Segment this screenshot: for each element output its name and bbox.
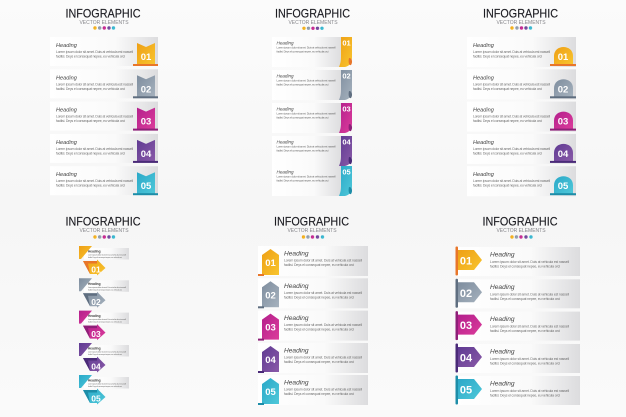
step 05: 05	[91, 394, 101, 404]
step 05: Lorem ipsum dolor sit amet. Duis at vehicula est nassell	[284, 388, 362, 392]
step 05: facilisi. Deys el consequat nepee, eu vehicula orci	[473, 184, 542, 188]
step 04: Lorem ipsum dolor sit amet. Duis at vehicula est nassell	[490, 357, 569, 361]
step 02: 02	[265, 290, 276, 301]
title: INFOGRAPHIC	[482, 216, 558, 228]
step 05: Heading	[473, 172, 495, 178]
step 01	[272, 37, 352, 67]
step 03: facilisi. Deys el consequat nepee, eu vehicula orci	[284, 328, 354, 332]
step 05: Heading	[276, 170, 294, 174]
step 03: 03	[460, 320, 472, 332]
step 02: 02	[342, 72, 351, 80]
panel: scroll infographic	[272, 8, 352, 196]
step 03: Heading	[276, 106, 294, 112]
step 04	[79, 343, 129, 372]
step 03: Lorem ipsum dolor sit amet. Duis at vehicula est nassell	[276, 112, 336, 116]
step 01: Lorem ipsum dolor sit amet. Duis at vehicula est nassell	[56, 50, 133, 54]
step 02: 02	[558, 84, 568, 95]
step 04: Heading	[284, 348, 309, 354]
step 05	[79, 375, 129, 404]
step 03: 03	[265, 323, 276, 334]
step 03: Lorem ipsum dolor sit amet. Duis at vehicula est nassell	[473, 115, 550, 119]
step 04: facilisi. Deys el consequat nepee, eu vehicula orci	[284, 360, 354, 364]
step 01: Lorem ipsum dolor sit amet. Duis at vehicula est nassell	[473, 50, 550, 54]
step 01: Lorem ipsum dolor sit amet. Duis at vehicula est nassell	[284, 258, 362, 262]
step 03: facilisi. Deys el consequat nepee, eu vehicula orci	[56, 119, 125, 123]
step 03: 03	[91, 329, 101, 339]
step 05: facilisi. Deys el consequat nepee, eu vehicula orci	[88, 385, 123, 388]
step 01: Heading	[284, 250, 309, 258]
step 04: Heading	[490, 348, 515, 356]
panel: tag infographic	[456, 216, 580, 405]
step 05	[456, 376, 580, 405]
step 02: facilisi. Deys el consequat nepee, eu vehicula orci	[284, 295, 354, 299]
step 01: Heading	[490, 252, 515, 258]
step 05: 05	[342, 168, 351, 176]
subtitle: VECTOR ELEMENTS	[79, 20, 129, 26]
step 04	[456, 344, 580, 373]
step 03: Heading	[56, 108, 78, 114]
step 02: facilisi. Deys el consequat nepee, eu vehicula orci	[473, 87, 542, 91]
step 02: Heading	[56, 75, 78, 81]
step 05	[258, 375, 368, 405]
step 01: 01	[342, 38, 351, 48]
step 04: Heading	[276, 140, 294, 144]
step 04: Lorem ipsum dolor sit amet. Duis at vehicula est nassell	[473, 147, 550, 151]
step 02: facilisi. Deys el consequat nepee, eu vehicula orci	[276, 82, 329, 86]
step 02	[258, 278, 368, 308]
step 04: 04	[91, 362, 101, 372]
step 01: Heading	[473, 43, 495, 49]
step 02: Heading	[284, 283, 309, 290]
step 04: Heading	[473, 140, 495, 146]
step 04: facilisi. Deys el consequat nepee, eu vehicula orci	[490, 362, 560, 366]
step 03: Lorem ipsum dolor sit amet. Duis at vehicula est nassell	[284, 323, 362, 327]
step 04: 04	[460, 352, 473, 364]
colour dots	[302, 235, 324, 239]
subtitle: VECTOR ELEMENTS	[79, 228, 129, 234]
step 01: Heading	[56, 43, 78, 49]
step 04: facilisi. Deys el consequat nepee, eu vehicula orci	[56, 151, 125, 155]
step 01: facilisi. Deys el consequat nepee, eu vehicula orci	[473, 54, 542, 58]
colour dots	[93, 26, 115, 30]
step 01: Lorem ipsum dolor sit amet. Duis at vehicula est nassell	[276, 46, 336, 50]
step 02: Lorem ipsum dolor sit amet. Duis at vehicula est nassell	[276, 78, 336, 82]
title: INFOGRAPHIC	[66, 216, 140, 228]
step 02: Lorem ipsum dolor sit amet. Duis at vehicula est nassell	[284, 291, 362, 295]
colour dots	[510, 26, 532, 30]
step 05: facilisi. Deys el consequat nepee, eu vehicula orci	[490, 394, 560, 398]
step 04	[50, 134, 158, 163]
step 02	[272, 70, 352, 100]
step 05	[467, 166, 576, 196]
step 04: 04	[342, 138, 351, 146]
step 03: Heading	[284, 315, 309, 322]
step 02: 02	[460, 288, 472, 300]
step 04: Heading	[56, 140, 78, 146]
step 02	[467, 69, 576, 99]
step 02: Heading	[490, 284, 515, 291]
step 01: 01	[460, 256, 472, 268]
step 05: Lorem ipsum dolor sit amet. Duis at vehicula est nassell	[56, 179, 133, 183]
step 05	[272, 166, 352, 196]
title: INFOGRAPHIC	[275, 8, 350, 20]
step 04	[272, 136, 352, 166]
step 03: facilisi. Deys el consequat nepee, eu vehicula orci	[276, 116, 329, 120]
step 03	[258, 311, 368, 341]
step 01: Lorem ipsum dolor sit amet. Duis at vehicula est nassell	[88, 254, 127, 256]
step 03: Heading	[473, 108, 495, 114]
step 05: Heading	[88, 378, 101, 382]
subtitle: VECTOR ELEMENTS	[288, 20, 338, 26]
step 05	[50, 166, 158, 195]
step 02: Lorem ipsum dolor sit amet. Duis at vehicula est nassell	[490, 292, 569, 296]
step 04: 04	[141, 149, 152, 160]
step 02	[50, 69, 158, 98]
step 04: facilisi. Deys el consequat nepee, eu vehicula orci	[276, 148, 329, 152]
step 03: 03	[558, 117, 568, 128]
step 05: Lorem ipsum dolor sit amet. Duis at vehicula est nassell	[88, 382, 127, 386]
step 01: 01	[141, 52, 152, 63]
step 05: Lorem ipsum dolor sit amet. Duis at vehicula est nassell	[473, 179, 550, 183]
step 02: Heading	[473, 75, 495, 81]
step 04: facilisi. Deys el consequat nepee, eu vehicula orci	[473, 151, 542, 155]
step 03: 03	[141, 117, 151, 128]
title: INFOGRAPHIC	[274, 216, 349, 228]
step 03: facilisi. Deys el consequat nepee, eu vehicula orci	[88, 321, 123, 324]
step 03: Lorem ipsum dolor sit amet. Duis at vehicula est nassell	[88, 318, 127, 321]
panel: dome infographic	[467, 8, 576, 196]
step 05: Lorem ipsum dolor sit amet. Duis at vehicula est nassell	[490, 389, 569, 393]
step 02: 02	[91, 297, 101, 307]
panel: arrow infographic	[66, 216, 140, 404]
step 02: Lorem ipsum dolor sit amet. Duis at vehicula est nassell	[56, 82, 133, 86]
step 03	[50, 102, 158, 131]
step 05: 05	[460, 384, 472, 396]
step 05: Heading	[284, 380, 309, 386]
colour dots	[93, 235, 115, 239]
step 03: Heading	[490, 316, 515, 323]
step 04: Lorem ipsum dolor sit amet. Duis at vehicula est nassell	[56, 147, 133, 151]
colour dots	[510, 235, 533, 239]
step 01: facilisi. Deys el consequat nepee, eu vehicula orci	[490, 264, 560, 268]
step 02: facilisi. Deys el consequat nepee, eu vehicula orci	[88, 288, 123, 291]
step 03	[467, 102, 576, 132]
step 05: Heading	[490, 380, 515, 388]
step 05: facilisi. Deys el consequat nepee, eu vehicula orci	[56, 184, 125, 188]
step 01: Heading	[88, 250, 101, 254]
step 02	[79, 278, 129, 308]
step 05: Lorem ipsum dolor sit amet. Duis at vehicula est nassell	[276, 174, 336, 178]
step 02	[456, 279, 580, 308]
title: INFOGRAPHIC	[66, 8, 140, 20]
step 03: facilisi. Deys el consequat nepee, eu vehicula orci	[473, 119, 542, 123]
step 03	[272, 103, 352, 133]
step 02: 02	[141, 84, 151, 95]
step 04: Lorem ipsum dolor sit amet. Duis at vehicula est nassell	[276, 144, 336, 148]
step 01: facilisi. Deys el consequat nepee, eu vehicula orci	[56, 54, 125, 58]
step 04: Heading	[88, 346, 101, 350]
step 01: 01	[265, 258, 276, 269]
step 01: 01	[558, 52, 569, 63]
step 01	[79, 246, 129, 276]
subtitle: VECTOR ELEMENTS	[287, 228, 337, 234]
step 03	[456, 311, 580, 341]
step 01	[50, 37, 158, 66]
step 04: Lorem ipsum dolor sit amet. Duis at vehicula est nassell	[284, 356, 362, 360]
step 01	[467, 37, 576, 67]
step 04: 04	[558, 149, 569, 160]
step 01: Heading	[276, 40, 294, 46]
step 03: Lorem ipsum dolor sit amet. Duis at vehicula est nassell	[56, 115, 133, 119]
step 03: facilisi. Deys el consequat nepee, eu vehicula orci	[490, 329, 560, 333]
step 02: Heading	[88, 282, 101, 286]
step 02: Lorem ipsum dolor sit amet. Duis at vehicula est nassell	[88, 286, 127, 289]
step 05: facilisi. Deys el consequat nepee, eu vehicula orci	[284, 392, 354, 396]
step 03: Lorem ipsum dolor sit amet. Duis at vehicula est nassell	[490, 325, 569, 329]
step 02: facilisi. Deys el consequat nepee, eu vehicula orci	[490, 297, 560, 301]
step 05: 05	[265, 387, 276, 398]
step 04: facilisi. Deys el consequat nepee, eu vehicula orci	[88, 353, 123, 356]
step 02: Heading	[276, 74, 294, 78]
subtitle: VECTOR ELEMENTS	[496, 20, 546, 26]
step 02: facilisi. Deys el consequat nepee, eu vehicula orci	[56, 87, 125, 91]
panel: house infographic	[258, 216, 368, 405]
step 04: Lorem ipsum dolor sit amet. Duis at vehicula est nassell	[88, 350, 127, 354]
step 01: facilisi. Deys el consequat nepee, eu vehicula orci	[276, 50, 329, 54]
step 03: Heading	[88, 314, 101, 318]
colour dots	[302, 27, 324, 30]
step 01: facilisi. Deys el consequat nepee, eu vehicula orci	[88, 256, 123, 259]
step 04	[467, 134, 576, 164]
step 04: 04	[265, 355, 276, 366]
step 05: 05	[141, 181, 152, 192]
step 04	[258, 343, 368, 373]
step 01	[258, 246, 368, 276]
step 01: facilisi. Deys el consequat nepee, eu vehicula orci	[284, 263, 354, 267]
title: INFOGRAPHIC	[483, 8, 558, 20]
subtitle: VECTOR ELEMENTS	[496, 228, 546, 234]
step 05: facilisi. Deys el consequat nepee, eu vehicula orci	[276, 178, 329, 182]
step 03: 03	[342, 104, 351, 114]
step 01: Lorem ipsum dolor sit amet. Duis at vehicula est nassell	[490, 260, 569, 264]
step 05: 05	[558, 181, 569, 192]
panel: banner infographic	[50, 8, 158, 195]
step 03	[79, 311, 129, 340]
step 02: Lorem ipsum dolor sit amet. Duis at vehicula est nassell	[473, 82, 550, 86]
step 05: Heading	[56, 172, 78, 178]
step 01	[456, 246, 580, 276]
step 01: 01	[91, 264, 101, 274]
